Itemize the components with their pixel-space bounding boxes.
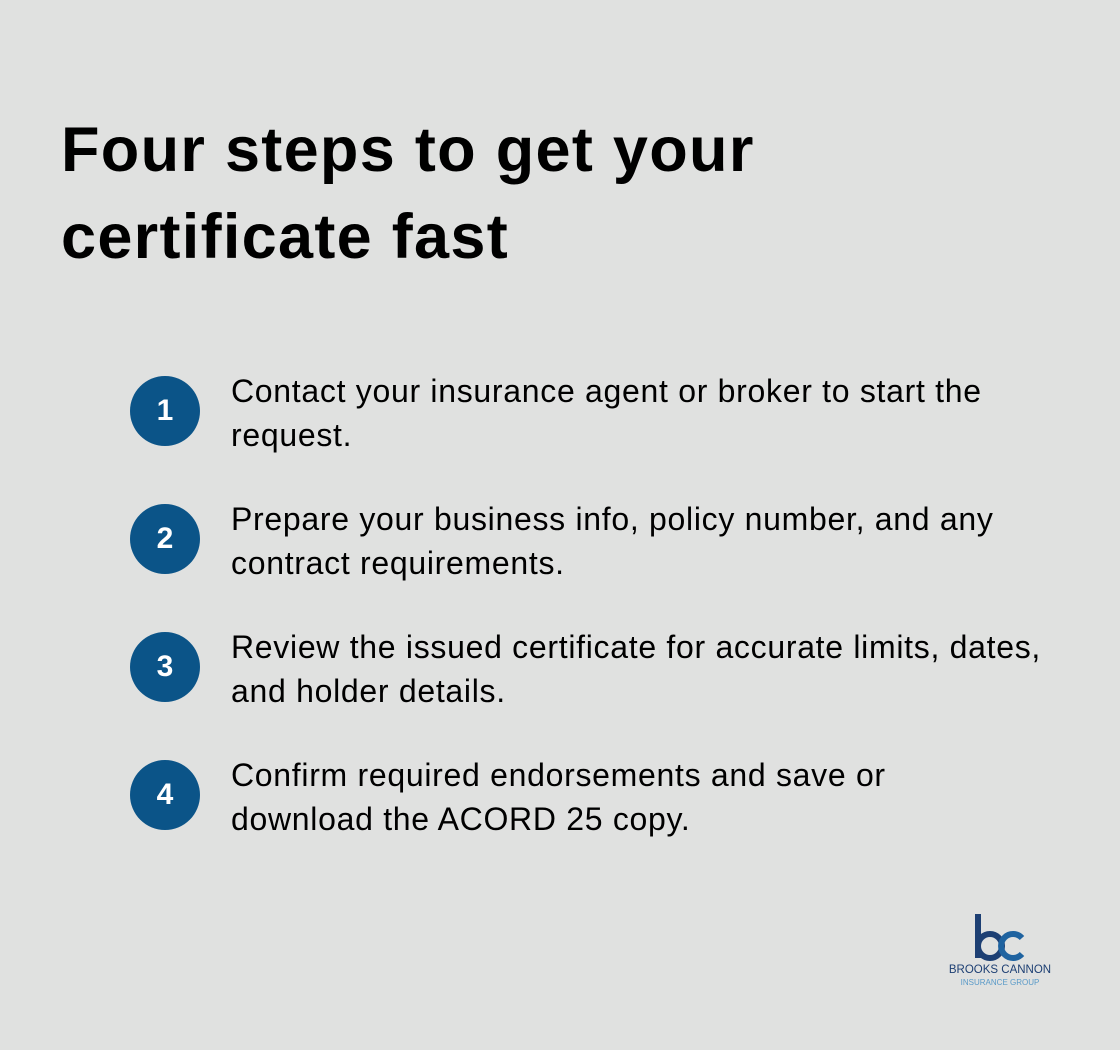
step 1: Contact your insurance agent or broker to start the bbox=[231, 373, 982, 409]
step 3: 3 bbox=[157, 650, 173, 683]
step 4 bbox=[130, 757, 886, 837]
title: certificate fast bbox=[61, 202, 509, 272]
step 1 bbox=[130, 373, 982, 453]
logo: INSURANCE GROUP bbox=[961, 978, 1039, 987]
step 1: request. bbox=[231, 417, 352, 453]
title: Four steps to get your bbox=[61, 115, 755, 185]
step 3: and holder details. bbox=[231, 673, 506, 709]
step 3: Review the issued certificate for accurate limits, dates, bbox=[231, 629, 1041, 665]
step 2: Prepare your business info, policy number, and any bbox=[231, 501, 994, 537]
step 4: download the ACORD 25 copy. bbox=[231, 801, 690, 837]
step 4: 4 bbox=[157, 778, 173, 811]
step 4: Confirm required endorsements and save or bbox=[231, 757, 886, 793]
logo: BROOKS CANNON bbox=[949, 964, 1051, 976]
step 3 bbox=[130, 629, 1041, 709]
step 2: contract requirements. bbox=[231, 545, 565, 581]
step 2 bbox=[130, 501, 994, 581]
step 2: 2 bbox=[157, 522, 173, 555]
title bbox=[61, 115, 755, 272]
logo bbox=[949, 914, 1051, 987]
step 1: 1 bbox=[157, 394, 173, 427]
